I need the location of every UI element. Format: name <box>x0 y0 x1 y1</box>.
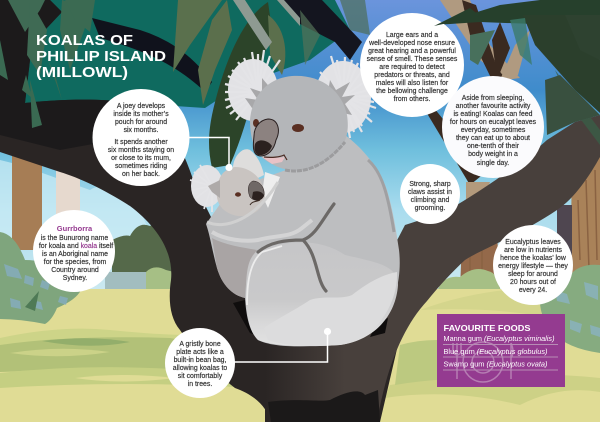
callout: eating: one-tenth of their <box>467 143 520 150</box>
icon: plate and cutlery <box>453 342 513 382</box>
background: distant trunks <box>12 150 600 300</box>
callout: ears and nose: males will also listen for <box>376 80 449 87</box>
callout: gurrborra: Country around <box>51 267 99 274</box>
koala mother: left eye <box>253 119 259 127</box>
callout: eating: is eating! Koalas can feed <box>454 111 533 118</box>
callout: eating: single day. <box>477 160 509 167</box>
food list <box>444 334 554 368</box>
callout: nutrients <box>493 225 573 305</box>
callout: nutrients: are low in nutrients <box>504 247 562 254</box>
koala mother: head <box>250 76 348 171</box>
joey: mouth <box>250 200 260 205</box>
callout: ears and nose: predators or threats, and <box>374 72 450 79</box>
callout: nutrients: 20 hours out of <box>510 279 556 286</box>
callout: eating: another favourite activity <box>456 103 531 110</box>
koala mother: claw lines <box>258 204 334 291</box>
panel: favourite foods <box>437 314 565 387</box>
callout: joey <box>92 89 190 186</box>
background: upper-right branches <box>425 0 530 212</box>
callout: joey: six months staying on <box>108 147 174 154</box>
koala mother: left ear <box>225 50 280 121</box>
joey: head <box>217 167 265 216</box>
callout: ears and nose: from others. <box>394 96 430 103</box>
callout: eating: they can eat up to about <box>456 135 530 142</box>
callout: claws <box>400 164 460 224</box>
callout: joey: sometimes riding <box>115 163 167 170</box>
callout: bone plate: A gristly bone <box>179 341 221 348</box>
background: clouds <box>0 160 154 244</box>
callout: gurrborra: for koala and koala itself <box>39 243 113 250</box>
food list: Blue gum (Eucalyptus globulus) <box>444 347 548 356</box>
koala mother: arm lower fur <box>212 220 312 241</box>
bush: left <box>0 232 81 324</box>
koala mother: nose <box>253 119 278 156</box>
callout: gurrborra <box>33 210 115 292</box>
leaf: large dark central <box>209 2 272 168</box>
koala: white chest patch <box>262 172 280 208</box>
bush: right <box>540 265 600 353</box>
title: KOALAS OF <box>36 32 133 49</box>
callout: nutrients: Eucalyptus leaves <box>505 239 561 246</box>
tree: left branch dark top <box>0 0 170 150</box>
callout: ears and nose: the bellowing challenge <box>376 88 448 95</box>
callout: claws: claws assist in <box>408 189 452 196</box>
callout: eating <box>442 76 544 178</box>
callout: joey: six months. <box>124 127 159 134</box>
callout: claws: grooming. <box>415 205 445 212</box>
callout: gurrborra: is the Bunurong name <box>41 235 108 242</box>
food list: Swamp gum (Eucalyptus ovata) <box>444 360 548 368</box>
callout: gurrborra: for the species, from <box>44 259 106 266</box>
callout: nutrients: sleep for around <box>508 271 558 278</box>
tree: dark trunk <box>0 0 420 422</box>
connector: joey pouch <box>188 138 233 171</box>
callout: bone plate <box>165 328 235 398</box>
leaves: upper left <box>0 0 370 128</box>
food heading: FAVOURITE FOODS <box>444 323 531 333</box>
callout: joey: or close to its mum, <box>111 155 171 162</box>
koala mother: body silhouette <box>206 135 400 346</box>
callout: bone plate: in trees. <box>188 381 212 388</box>
title: (MILLOWL) <box>36 64 128 81</box>
background: grey branch top <box>233 0 300 50</box>
tree: dark lower blob <box>268 390 380 422</box>
callout: ears and nose <box>360 13 464 117</box>
koala mother: torso shadow side <box>212 238 257 298</box>
callout: nutrients: hence the koalas’ low <box>500 255 566 262</box>
callout: nutrients: every 24. <box>519 287 547 294</box>
koala mother: shadow <box>233 300 388 337</box>
koala: mother <box>206 50 400 346</box>
callout: joey: on her back. <box>122 171 160 178</box>
food list: Manna gum (Eucalyptus viminalis) <box>444 334 554 343</box>
ground <box>0 288 600 422</box>
joey: inner ear <box>208 180 220 198</box>
callout: bone plate: sit comfortably <box>178 373 223 380</box>
callout: bone plate: built-in bean bag, <box>174 357 227 364</box>
joey: nose <box>248 181 264 200</box>
leaf: olive right of big leaf <box>268 15 285 75</box>
koala mother: chin fur <box>285 142 345 171</box>
callout: ears and nose: are required to detect <box>379 64 445 71</box>
background: sky <box>0 0 600 300</box>
koala mother: right ear <box>315 56 376 138</box>
tree: brown right limb <box>265 115 600 422</box>
callout: bone plate: plate acts like a <box>176 349 224 356</box>
callout: ears and nose: sense of smell. These senses <box>367 56 458 63</box>
background: teal canopy <box>0 0 350 150</box>
joey: left ear <box>190 165 223 212</box>
koala mother: leg edge light <box>247 246 282 305</box>
callout: eating: everyday, sometimes <box>461 127 526 134</box>
connector: bone plate <box>233 328 331 362</box>
callout: eating: body weight in a <box>468 151 518 158</box>
callout: claws: climbing and <box>411 197 450 204</box>
joey: chin fur <box>207 182 278 225</box>
leaf tip overlapping ears callout <box>434 8 480 26</box>
callout: eating: Aside from sleeping, <box>462 95 524 102</box>
koala mother: nostrils <box>254 140 272 155</box>
title: PHILLIP ISLAND <box>36 48 166 65</box>
joey: eye <box>235 192 241 197</box>
callout: eating: for hours on eucalypt leaves <box>450 119 537 126</box>
callout: ears and nose: great hearing and a powerful <box>368 48 456 55</box>
leaves: upper right <box>435 0 600 145</box>
callout: gurrborra: Sydney. <box>63 275 87 282</box>
koala mother: back edge fur <box>368 160 394 232</box>
koala mother: mouth <box>262 157 285 164</box>
background: distant bushes <box>105 224 500 290</box>
koala mother: leg <box>246 242 398 346</box>
callout: joey: It spends another <box>114 139 168 146</box>
tree: upper middle branch <box>283 0 362 60</box>
callout: joey: inside its mother’s <box>113 111 169 118</box>
koala mother: leg light patch <box>264 272 397 346</box>
callout: gurrborra: is an Aboriginal name <box>42 251 108 258</box>
leaves: lower right hanging <box>545 75 600 135</box>
tree: upper background branch <box>92 18 212 92</box>
callout: ears and nose: Large ears and a <box>386 32 438 39</box>
callout: gurrborra: Gurrborra <box>57 224 93 233</box>
callout: bone plate: allowing koalas to <box>173 365 227 372</box>
koala: joey <box>190 149 278 225</box>
callout: nutrients: energy lifestyle — they <box>498 263 568 270</box>
callout: claws: Strong, sharp <box>409 181 451 188</box>
koala mother: right eye <box>292 124 304 132</box>
callout: joey: A joey develops <box>117 103 166 110</box>
callout: ears and nose: well-developed nose ensure <box>368 40 455 47</box>
joey: top ear <box>233 149 264 182</box>
callout: joey: pouch for around <box>115 119 167 126</box>
